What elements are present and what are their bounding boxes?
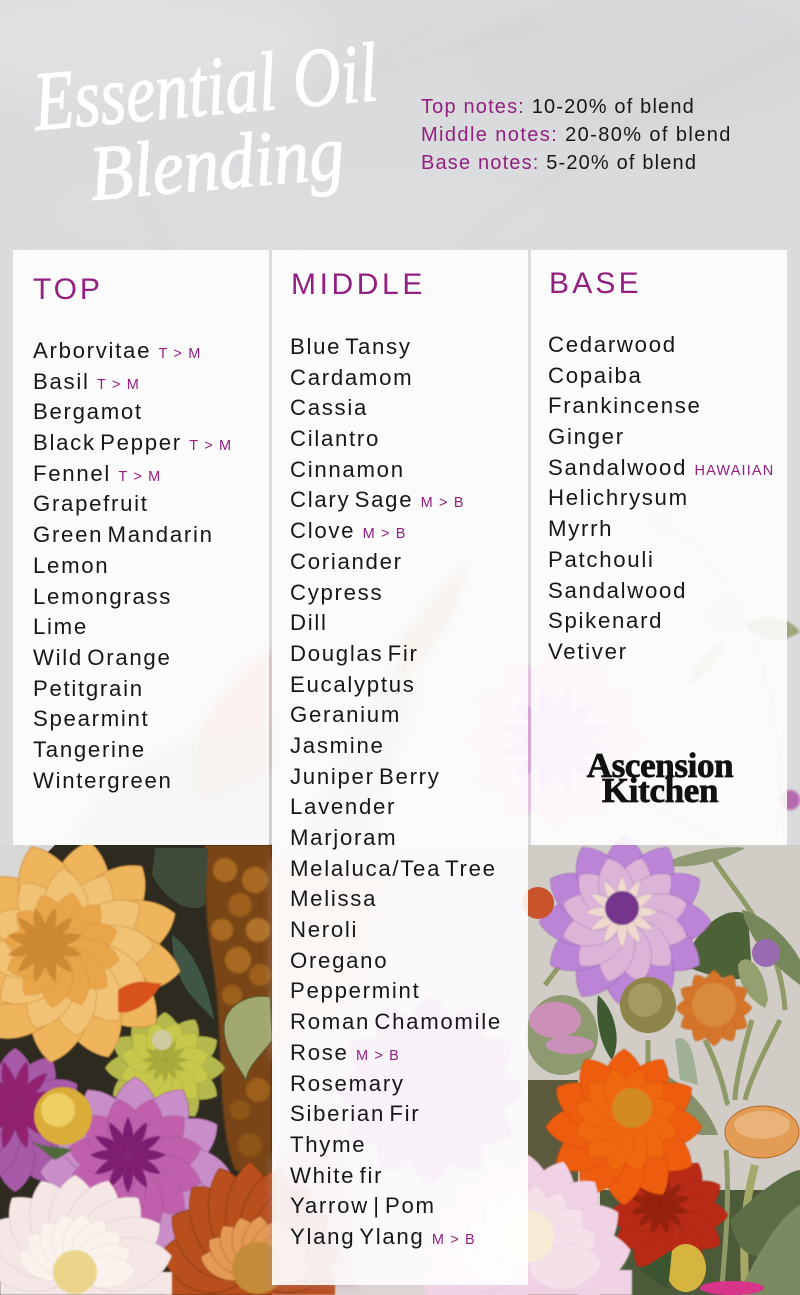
- list: middle note oils: Ylang Ylang M > B: [290, 1224, 476, 1249]
- list: top note oils: Lime: [33, 614, 88, 639]
- flower: orange zinnia: [546, 1049, 702, 1205]
- list: middle note oils: White fir: [290, 1163, 383, 1188]
- list: middle note oils: Oregano: [290, 948, 388, 973]
- title: Blending: [86, 108, 348, 217]
- list: base note oils: Sandalwood HAWAIIAN: [548, 455, 774, 480]
- list: base note oils: Patchouli: [548, 547, 655, 572]
- list: middle note oils: Neroli: [290, 917, 358, 942]
- ratio legend: Middle notes: 20-80% of blend: [421, 124, 732, 146]
- logo: Ascension Kitchen: [586, 746, 734, 810]
- list: top note oils: Petitgrain: [33, 676, 144, 701]
- list: top note oils: Arborvitae T > M: [33, 338, 201, 363]
- list: top note oils: Basil T > M: [33, 369, 140, 394]
- flower: magenta dahlia: [40, 1077, 230, 1267]
- ghost flower: purple dahlia behind middle panel: [335, 995, 525, 1185]
- panel: middle notes: [272, 250, 528, 1285]
- ghost foliage behind middle panel: [272, 860, 390, 1285]
- list: middle note oils: Douglas Fir: [290, 641, 419, 666]
- list: base note oils: Sandalwood: [548, 578, 687, 602]
- list: middle note oils: Siberian Fir: [290, 1101, 420, 1126]
- list: base note oils: Helichrysum: [548, 485, 689, 510]
- leaves at right: [597, 847, 800, 1295]
- list: middle note oils: Peppermint: [290, 978, 420, 1003]
- ratio legend: Top notes: 10-20% of blend: [421, 96, 695, 118]
- small purple bud: [752, 939, 780, 967]
- list: base note oils: Frankincense: [548, 393, 702, 418]
- flower: dried orange strawflower: [676, 970, 752, 1046]
- list: top note oils: [33, 338, 232, 793]
- list: middle note oils: Cypress: [290, 580, 383, 604]
- flower: magenta at bottom edge: [700, 1281, 764, 1295]
- flower: pale orange strawflower: [725, 1106, 799, 1158]
- heading: top: TOP: [33, 273, 103, 306]
- heading: middle: MIDDLE: [291, 268, 426, 301]
- yarrow cluster: [526, 995, 598, 1075]
- list: top note oils: Wintergreen: [33, 768, 173, 793]
- flower: red zinnia: [608, 1155, 728, 1275]
- ghost flower: thistles and stems at right: [644, 502, 800, 845]
- flower: pale pink dahlia at centre bottom: [421, 1151, 635, 1295]
- amaranth: brown dried plume: [205, 845, 272, 1180]
- flower: purple dahlia at left edge: [0, 1048, 87, 1192]
- list: middle note oils: Coriander: [290, 549, 403, 574]
- stems and leaves at right: [545, 850, 785, 1295]
- list: middle note oils: Thyme: [290, 1132, 366, 1157]
- list: middle note oils: Dill: [290, 610, 328, 635]
- list: base note oils: Ginger: [548, 424, 625, 449]
- logo: Ascension Kitchen: Ascension: [587, 746, 733, 785]
- list: middle note oils: Roman Chamomile: [290, 1009, 502, 1034]
- list: middle note oils: Eucalyptus: [290, 672, 416, 697]
- list: base note oils: [548, 332, 774, 664]
- list: base note oils: Cedarwood: [548, 332, 677, 357]
- list: middle note oils: Clove M > B: [290, 518, 407, 543]
- list: base note oils: Spikenard: [548, 608, 663, 633]
- list: middle note oils: Cardamom: [290, 365, 413, 390]
- flower: small orange bud at edge: [522, 887, 554, 919]
- list: top note oils: Black Pepper T > M: [33, 430, 232, 455]
- list: top note oils: Fennel T > M: [33, 461, 161, 486]
- leaf: dark green: [152, 848, 208, 908]
- list: middle note oils: Cinnamon: [290, 457, 405, 482]
- ghost flower: pink dahlia behind panels: [465, 650, 645, 830]
- list: middle note oils: Marjoram: [290, 825, 397, 850]
- panel: top notes: [13, 250, 269, 845]
- panel: base notes: [531, 250, 787, 845]
- list: base note oils: Copaiba: [548, 363, 643, 388]
- flower: large orange dahlia: [0, 822, 200, 1082]
- list: middle note oils: Jasmine: [290, 733, 385, 758]
- ghost plant: brown feather behind middle panel: [300, 562, 468, 845]
- list: middle note oils: Lavender: [290, 794, 396, 819]
- list: middle note oils: [290, 334, 502, 1249]
- list: top note oils: Grapefruit: [33, 491, 149, 516]
- flower: pale pink dahlia: [0, 1172, 176, 1295]
- photo base: dark foliage at left, pale wall at right: [0, 845, 800, 1295]
- list: middle note oils: Clary Sage M > B: [290, 487, 465, 512]
- leaf: dark lower: [172, 935, 214, 1020]
- flower: purple dahlia at right: [539, 836, 711, 1008]
- list: top note oils: Spearmint: [33, 706, 149, 731]
- list: middle note oils: Geranium: [290, 702, 401, 727]
- logo: Ascension Kitchen: Kitchen: [602, 771, 718, 810]
- list: top note oils: Green Mandarin: [33, 522, 214, 547]
- list: top note oils: Lemongrass: [33, 584, 172, 608]
- list: top note oils: Tangerine: [33, 737, 146, 762]
- ratio legend: Base notes: 5-20% of blend: [421, 152, 697, 174]
- flower: yellow bud: [30, 1087, 92, 1160]
- list: middle note oils: Rosemary: [290, 1070, 405, 1096]
- title: [29, 26, 381, 217]
- heading: base: BASE: [549, 267, 642, 300]
- flower: yellow bud lower right: [640, 1244, 706, 1292]
- flower: orange-red dahlia: [157, 1158, 343, 1295]
- list: middle note oils: Yarrow | Pom: [290, 1193, 436, 1218]
- list: middle note oils: Melissa: [290, 886, 377, 911]
- list: middle note oils: Cilantro: [290, 426, 380, 451]
- list: top note oils: Wild Orange: [33, 645, 172, 670]
- list: middle note oils: Blue Tansy: [290, 334, 412, 359]
- list: top note oils: Lemon: [33, 553, 109, 578]
- list: base note oils: Myrrh: [548, 516, 613, 541]
- list: top note oils: Bergamot: [33, 399, 143, 424]
- list: middle note oils: Cassia: [290, 395, 368, 420]
- list: middle note oils: Juniper Berry: [290, 764, 441, 789]
- list: middle note oils: Melaluca/Tea Tree: [290, 856, 497, 881]
- leaf: pale green: [224, 996, 272, 1080]
- list: middle note oils: Rose M > B: [290, 1040, 400, 1065]
- ghost plant: red feather behind top panel: [70, 650, 268, 845]
- ratio legend: [421, 96, 732, 174]
- list: base note oils: Vetiver: [548, 639, 628, 664]
- seed head: [620, 977, 676, 1033]
- flower: yellow-green zinnia: [105, 1011, 225, 1124]
